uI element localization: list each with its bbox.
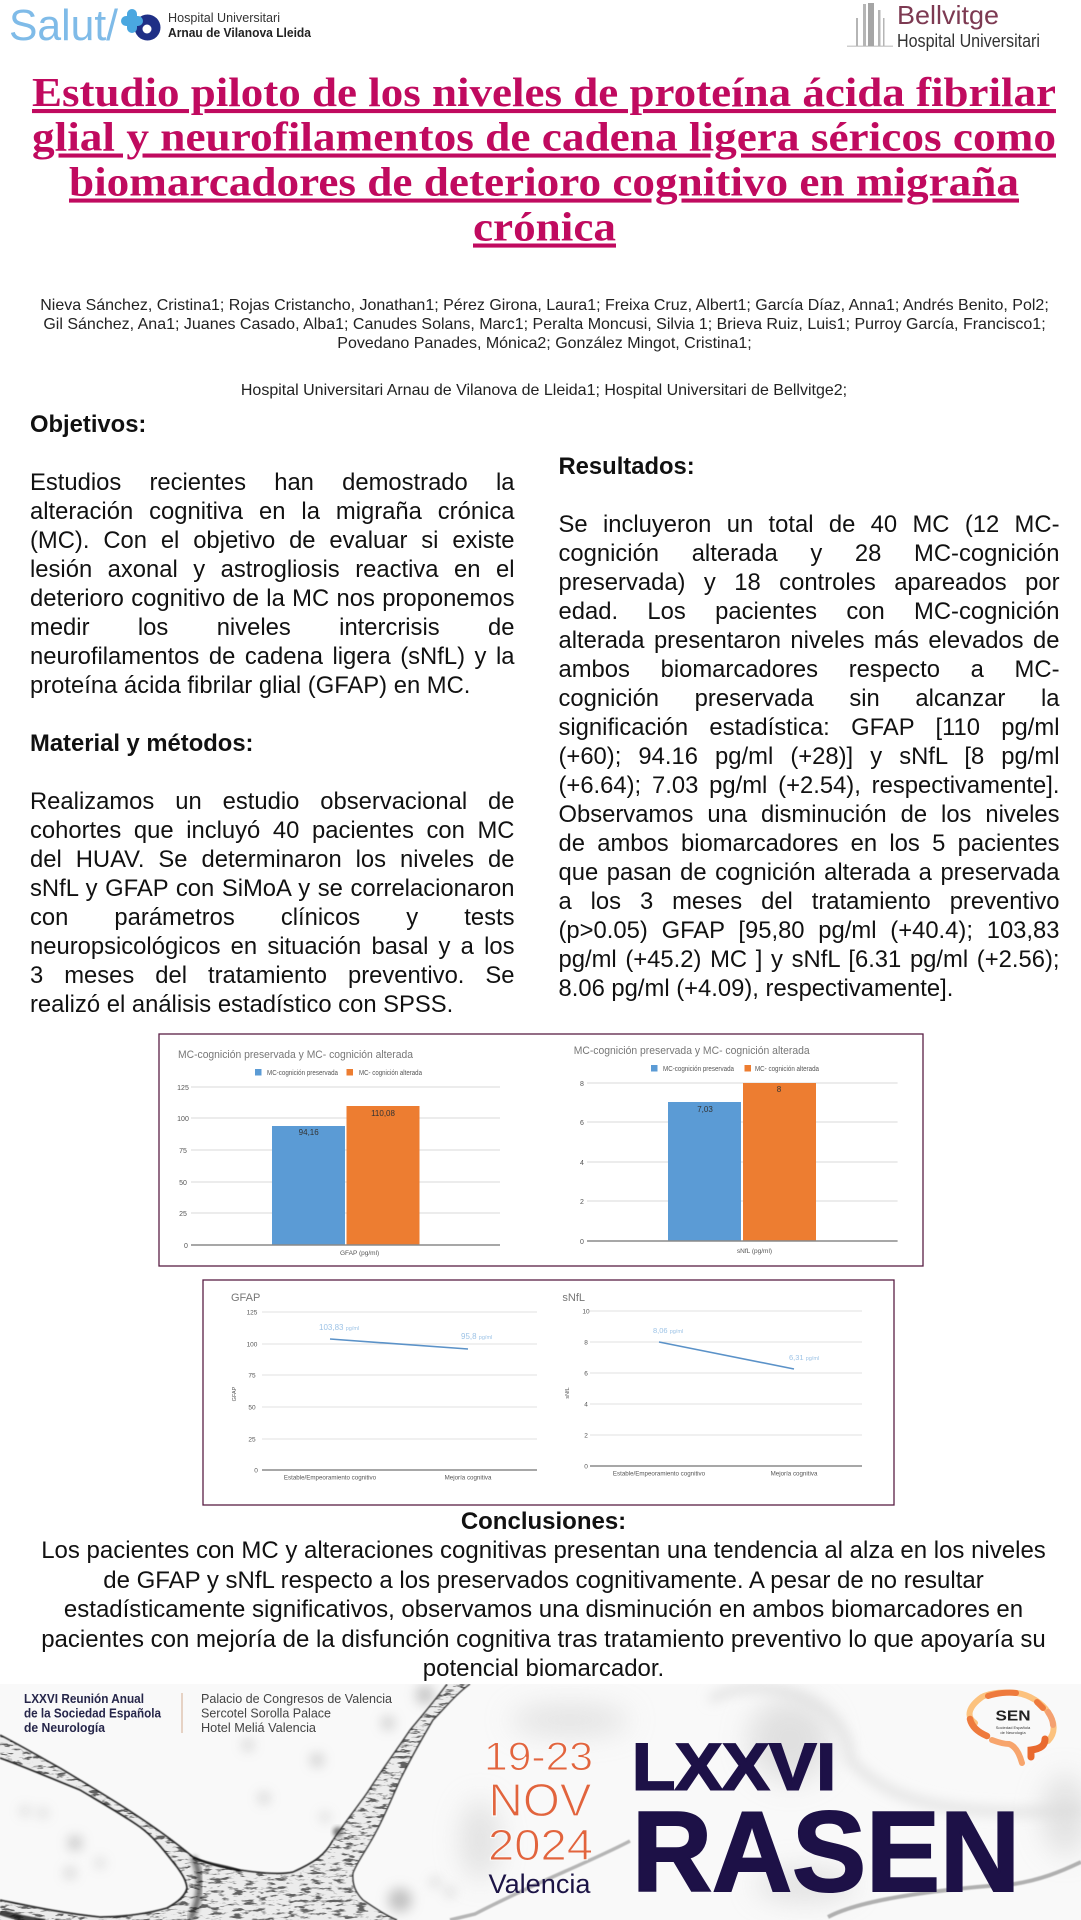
text block: resultados <box>558 453 1060 1002</box>
chart: GFAP bar chart: MC- cognición alterada <box>359 1070 422 1077</box>
icon: building bars <box>847 3 893 47</box>
text block: objetivos y material y métodos: del HUAV. Se determinaron los niveles de <box>30 846 514 873</box>
text: venues <box>202 1694 392 1732</box>
chart: sNfL bar chart <box>574 1045 898 1255</box>
panel: line charts <box>203 1280 894 1505</box>
text: dates: NOV <box>488 1774 592 1826</box>
chart: sNfL line chart: 0 <box>584 1464 588 1470</box>
text block: objetivos y material y métodos: proteína ácida fibrilar glial (GFAP) en MC. <box>30 672 470 699</box>
chart: GFAP bar chart: 50 <box>179 1180 187 1187</box>
text: LXXVI RASEN <box>636 1743 1014 1893</box>
logo: Salut / Hospital Universitari Arnau de Vilanova Lleida: Salut/ <box>9 1 119 50</box>
text block: resultados: cognición alterada y 28 MC-cognición <box>558 540 1060 567</box>
title: Estudio piloto de los niveles de proteína ácida fibrilar <box>32 69 1056 115</box>
text block: conclusiones: estadísticamente significativos, observamos una disminución en ambos biomarcadores en <box>64 1596 1023 1623</box>
text block: objetivos y material y métodos: con parámetros clínicos y tests <box>30 904 514 931</box>
chart: sNfL line chart: Estable/Empeoramiento cognitivo <box>613 1470 706 1478</box>
chart: sNfL bar chart: 8 <box>777 1085 782 1094</box>
text block: resultados: 8.06 pg/ml (+4.09), respectivamente]. <box>558 975 953 1002</box>
logo: Bellvitge Hospital Universitari: Hospital Universitari <box>897 31 1040 51</box>
text block: resultados: que pasan de cognición alterada a preservada <box>558 859 1060 886</box>
chart: GFAP bar chart: 125 <box>177 1085 189 1092</box>
authors: Nieva Sánchez, Cristina1; Rojas Cristancho, Jonathan1; Pérez Girona, Laura1; Freixa Cruz, Albert1; García Díaz, Anna1; Andrés Benito, Pol2; <box>40 297 1049 314</box>
logo: Salut / Hospital Universitari Arnau de Vilanova Lleida: Arnau de Vilanova Lleida <box>168 25 312 40</box>
text block: objetivos y material y métodos: medir los niveles intercrisis de <box>30 614 514 641</box>
chart: GFAP line chart: 103,83 pg/ml <box>319 1323 359 1332</box>
text block: objetivos y material y métodos: Material y métodos: <box>30 730 253 757</box>
logo: Bellvitge Hospital Universitari <box>847 0 1040 51</box>
chart: sNfL line chart: Mejoría cognitiva <box>771 1470 818 1478</box>
text block: resultados: edad. Los pacientes con MC-cognición <box>558 598 1060 625</box>
text: dates: 2024 <box>488 1821 593 1870</box>
text: congress name: de Neurología <box>24 1721 106 1735</box>
chart: GFAP line chart: Mejoría cognitiva <box>445 1474 492 1482</box>
chart: sNfL bar chart: 4 <box>580 1160 584 1167</box>
chart: sNfL bar chart: 8 <box>580 1081 584 1088</box>
title: crónica <box>473 204 616 250</box>
affiliations: Hospital Universitari Arnau de Vilanova de Lleida1; Hospital Universitari de Bellvitge2; <box>241 382 847 399</box>
chart: sNfL bar chart: 6 <box>580 1120 584 1127</box>
logo: Salut / Hospital Universitari Arnau de Vilanova Lleida <box>9 1 312 50</box>
chart: GFAP bar chart: 25 <box>179 1211 187 1218</box>
chart: sNfL line chart: 8 <box>584 1340 588 1346</box>
chart: sNfL bar chart: 2 <box>580 1199 584 1206</box>
text block: objetivos y material y métodos: deterioro cognitivo de la MC nos proponemos <box>30 585 514 612</box>
text block: objetivos y material y métodos: neuropsicológicos en situación basal y a los <box>30 933 514 960</box>
logo: SEN brain: de Neurología <box>1000 1730 1026 1735</box>
text block: conclusiones: Los pacientes con MC y alteraciones cognitivas presentan una tendencia al alza en los niveles <box>41 1537 1046 1564</box>
title: biomarcadores de deterioro cognitivo en migraña <box>69 158 1019 204</box>
text block: resultados: a los 3 meses del tratamiento preventivo <box>558 888 1060 915</box>
text: dates: 19-23 <box>484 1735 593 1779</box>
chart: GFAP line chart: 50 <box>248 1404 256 1412</box>
text: dates: Valencia <box>488 1869 591 1899</box>
text: LXXVI RASEN: LXXVI <box>632 1730 836 1804</box>
text block: objetivos y material y métodos: 3 meses del tratamiento preventivo. Se <box>30 962 514 989</box>
chart: sNfL bar chart: MC- cognición alterada <box>755 1066 819 1073</box>
text: congress name <box>24 1692 162 1735</box>
text: congress name: de la Sociedad Española <box>24 1706 162 1720</box>
text: LXXVI RASEN: RASEN <box>632 1789 1020 1916</box>
chart: GFAP line chart: 75 <box>248 1372 256 1380</box>
chart: GFAP bar chart: 110,08 <box>371 1109 395 1118</box>
text block: conclusiones: Conclusiones: <box>461 1508 626 1535</box>
text block: resultados: Se incluyeron un total de 40 MC (12 MC- <box>558 511 1060 538</box>
text block: resultados: Resultados: <box>558 453 695 480</box>
chart: GFAP line chart: 0 <box>254 1468 258 1474</box>
title: glial y neurofilamentos de cadena ligera séricos como <box>32 114 1056 160</box>
text block: conclusiones <box>41 1508 1046 1682</box>
text block: objetivos y material y métodos: lesión axonal y astrogliosis reactiva en el <box>30 556 514 583</box>
chart: sNfL bar chart: sNfL (pg/ml) <box>737 1248 772 1255</box>
authors: Povedano Panades, Mónica2; González Mingot, Cristina1; <box>337 335 752 352</box>
chart: GFAP line chart: GFAP <box>231 1292 260 1304</box>
chart: GFAP bar chart: MC-cognición preservada <box>267 1070 338 1077</box>
logo: Salut / Hospital Universitari Arnau de Vilanova Lleida: Hospital Universitari <box>168 11 280 25</box>
chart: GFAP bar chart: GFAP (pg/ml) <box>340 1250 379 1257</box>
chart: GFAP bar chart <box>177 1049 500 1257</box>
text block: conclusiones: potencial biomarcador. <box>423 1655 664 1682</box>
text block: objetivos y material y métodos: alteración cognitiva en la migraña crónica <box>30 498 514 525</box>
authors <box>40 297 1049 352</box>
chart: GFAP bar chart: 75 <box>179 1148 187 1155</box>
chart: sNfL bar chart: 0 <box>580 1239 584 1246</box>
chart: sNfL bar chart: MC-cognición preservada y MC- cognición alterada <box>574 1045 811 1057</box>
text block: objetivos y material y métodos: realizó el análisis estadístico con SPSS. <box>30 991 453 1018</box>
chart: sNfL line chart: sNfL <box>562 1292 585 1304</box>
text block: resultados: Observamos una disminución de los niveles <box>558 801 1060 828</box>
panel: bar charts <box>159 1034 923 1266</box>
logo: SEN brain <box>970 1692 1054 1763</box>
text: venues: Palacio de Congresos de Valencia <box>201 1692 392 1706</box>
text block: conclusiones: pacientes con mejoría de la disfunción cognitiva tras tratamiento preventivo lo que apoyaría su <box>41 1626 1046 1653</box>
chart: sNfL line chart <box>562 1292 862 1478</box>
chart: sNfL bar chart: 7,03 <box>697 1105 713 1114</box>
text block: resultados: de ambos biomarcadores en los 5 pacientes <box>558 830 1060 857</box>
text block: resultados: pg/ml (+45.2) MC ] y sNfL [6.31 pg/ml (+2.56); <box>558 946 1060 973</box>
chart: GFAP bar chart: 94,16 <box>299 1128 319 1137</box>
text block: conclusiones: de GFAP y sNfL respecto a los preservados cognitivamente. A pesar de no resultar <box>103 1567 984 1594</box>
chart: GFAP line chart: Estable/Empeoramiento cognitivo <box>284 1474 377 1482</box>
text block: objetivos y material y métodos: sNfL y GFAP con SiMoA y se correlacionaron <box>30 875 514 902</box>
icon: blue cross and navy a <box>121 9 160 40</box>
text block: objetivos y material y métodos: Realizamos un estudio observacional de <box>30 788 514 815</box>
chart: GFAP line chart: 125 <box>247 1310 258 1316</box>
logo: SEN brain: SEN <box>996 1708 1030 1724</box>
chart: sNfL line chart: 2 <box>584 1432 588 1440</box>
chart: sNfL line chart: 4 <box>584 1402 588 1408</box>
chart: sNfL line chart: 10 <box>582 1308 590 1316</box>
text block: objetivos y material y métodos: Estudios recientes han demostrado la <box>30 469 514 496</box>
authors: Gil Sánchez, Ana1; Juanes Casado, Alba1; Canudes Solans, Marc1; Peralta Moncusi, Silvia 1; Brieva Ruiz, Luis1; Purroy García, Francisco1; <box>43 316 1046 333</box>
text: dates <box>488 1742 591 1894</box>
title <box>32 69 1056 250</box>
chart: sNfL line chart: 6 <box>584 1370 588 1378</box>
chart: GFAP line chart: 95,8 pg/ml <box>461 1332 492 1341</box>
banner: RASEN congress footer <box>0 1684 1081 1920</box>
text block: objetivos y material y métodos <box>30 411 514 1018</box>
text block: resultados: (p>0.05) GFAP [95,80 pg/ml (+40.4); 103,83 <box>558 917 1060 944</box>
chart: GFAP bar chart: MC-cognición preservada y MC- cognición alterada <box>178 1049 414 1061</box>
text: congress name: LXXVI Reunión Anual <box>24 1692 144 1706</box>
chart: sNfL line chart: 6,31 pg/ml <box>789 1353 819 1362</box>
chart: GFAP line chart: 25 <box>248 1436 256 1444</box>
chart: GFAP line chart <box>231 1292 537 1482</box>
logo: SEN brain: Sociedad Española <box>996 1725 1031 1730</box>
text block: resultados: (+6.64); 7.03 pg/ml (+2.54), respectivamente]. <box>558 772 1060 799</box>
text block: resultados: cognición preservada sin alcanzar la <box>558 685 1060 712</box>
text block: objetivos y material y métodos: (MC). Con el objetivo de evaluar si existe <box>30 527 514 554</box>
text: venues: Sercotel Sorolla Palace <box>201 1706 331 1720</box>
text block: resultados: ambos biomarcadores respecto a MC- <box>558 656 1060 683</box>
text: venues: Hotel Meliá Valencia <box>201 1721 316 1735</box>
text block: objetivos y material y métodos: Objetivos: <box>30 411 146 438</box>
chart: GFAP bar chart: 100 <box>177 1116 189 1123</box>
text block: objetivos y material y métodos: cohortes que incluyó 40 pacientes con MC <box>30 817 514 844</box>
text block: resultados: significación estadística: GFAP [110 pg/ml <box>558 714 1060 741</box>
logo: Bellvitge Hospital Universitari: Bellvitge <box>897 0 999 30</box>
chart: GFAP bar chart: 0 <box>184 1243 188 1250</box>
chart: sNfL line chart: 8,06 pg/ml <box>653 1326 683 1335</box>
text block: resultados: alterada presentaron niveles más elevados de <box>558 627 1060 654</box>
chart: GFAP line chart: GFAP <box>232 1386 238 1401</box>
text block: resultados: preservada) y 18 controles apareados por <box>558 569 1060 596</box>
text block: objetivos y material y métodos: neurofilamentos de cadena ligera (sNfL) y la <box>30 643 514 670</box>
chart: sNfL bar chart: MC-cognición preservada <box>663 1066 734 1073</box>
chart: GFAP line chart: 100 <box>247 1342 258 1348</box>
chart: sNfL line chart: sNfL <box>565 1387 571 1399</box>
text block: resultados: (+60); 94.16 pg/ml (+28)] y sNfL [8 pg/ml <box>558 743 1060 770</box>
illustration: neuron <box>0 1684 480 1920</box>
